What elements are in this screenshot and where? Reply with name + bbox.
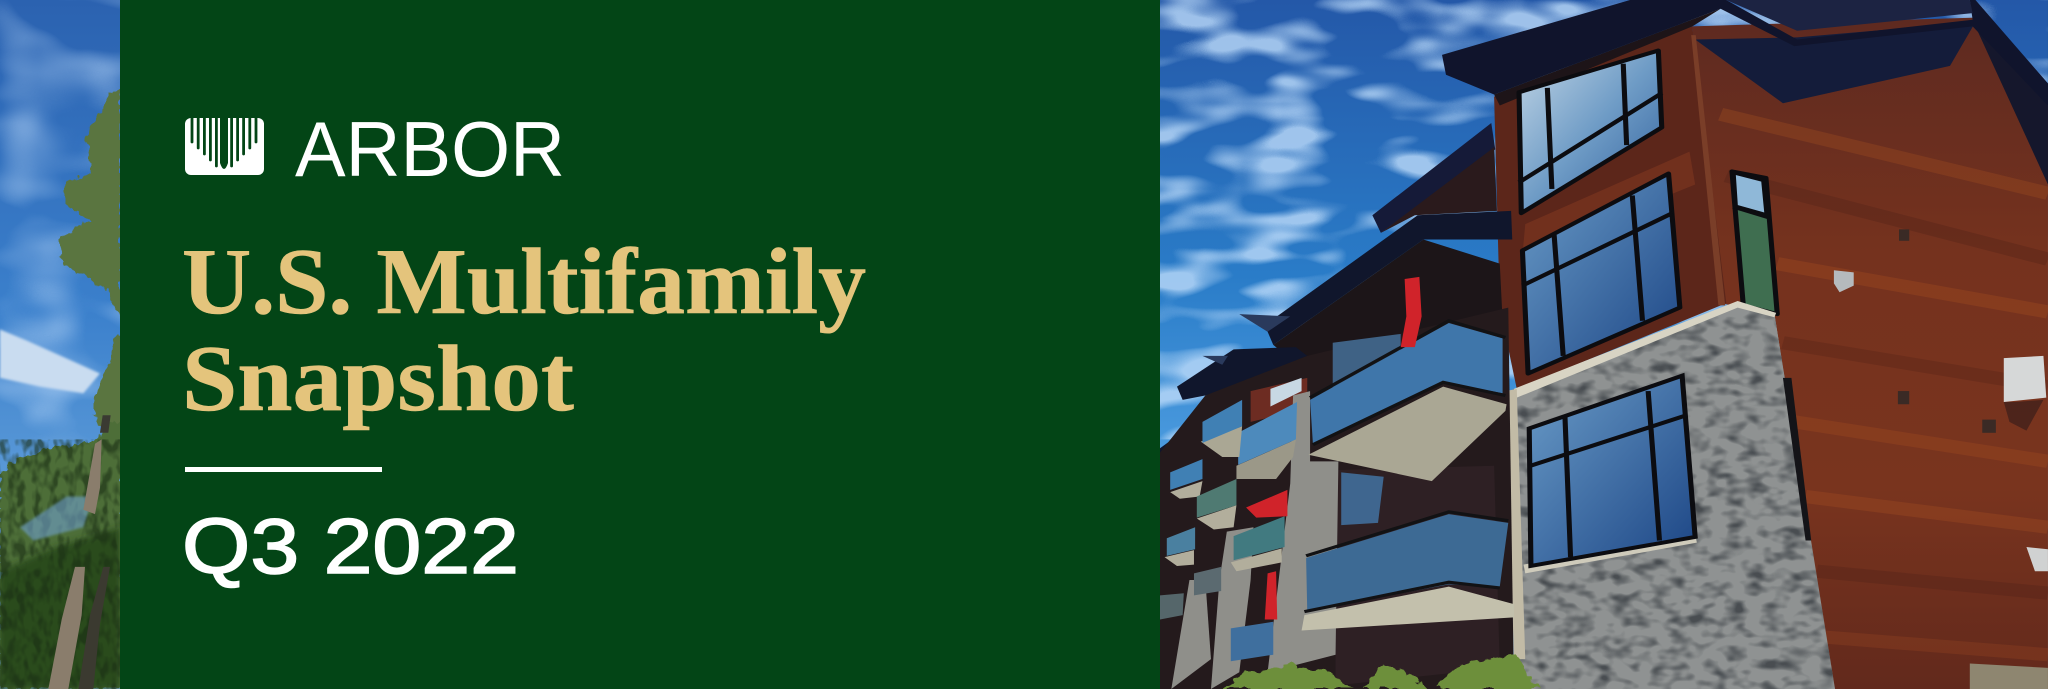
lower window xyxy=(1529,376,1695,566)
divider rule xyxy=(185,467,382,472)
stone base xyxy=(1497,301,1835,689)
photo: sky and pine tree xyxy=(0,0,122,689)
eave shadow xyxy=(1695,22,1975,103)
right sky with clouds xyxy=(1160,0,2048,689)
subtitle: quarter: Q3 2022 xyxy=(182,502,519,590)
stone pillars xyxy=(1171,391,1338,689)
upper left roofs xyxy=(1160,123,1512,457)
pine tree xyxy=(0,90,122,689)
balconies xyxy=(1160,321,1514,661)
title: U.S. Multifamily xyxy=(182,230,866,334)
left sky xyxy=(0,0,120,689)
icon: Arbor logo mark xyxy=(185,115,264,175)
upper windows xyxy=(1519,51,1777,373)
photo: apartment building xyxy=(1160,0,2048,689)
shrubs xyxy=(1225,655,1539,689)
roof xyxy=(1442,0,2048,105)
title: Snapshot xyxy=(182,327,574,431)
left facade xyxy=(1160,308,1514,689)
panel: green title block xyxy=(120,0,1160,689)
wall fixtures xyxy=(1834,229,2048,571)
logo wordmark: ARBOR xyxy=(295,105,565,193)
tower wall xyxy=(1494,26,1726,389)
main wood wall xyxy=(1692,18,2048,689)
red umbrellas xyxy=(1246,277,1422,620)
